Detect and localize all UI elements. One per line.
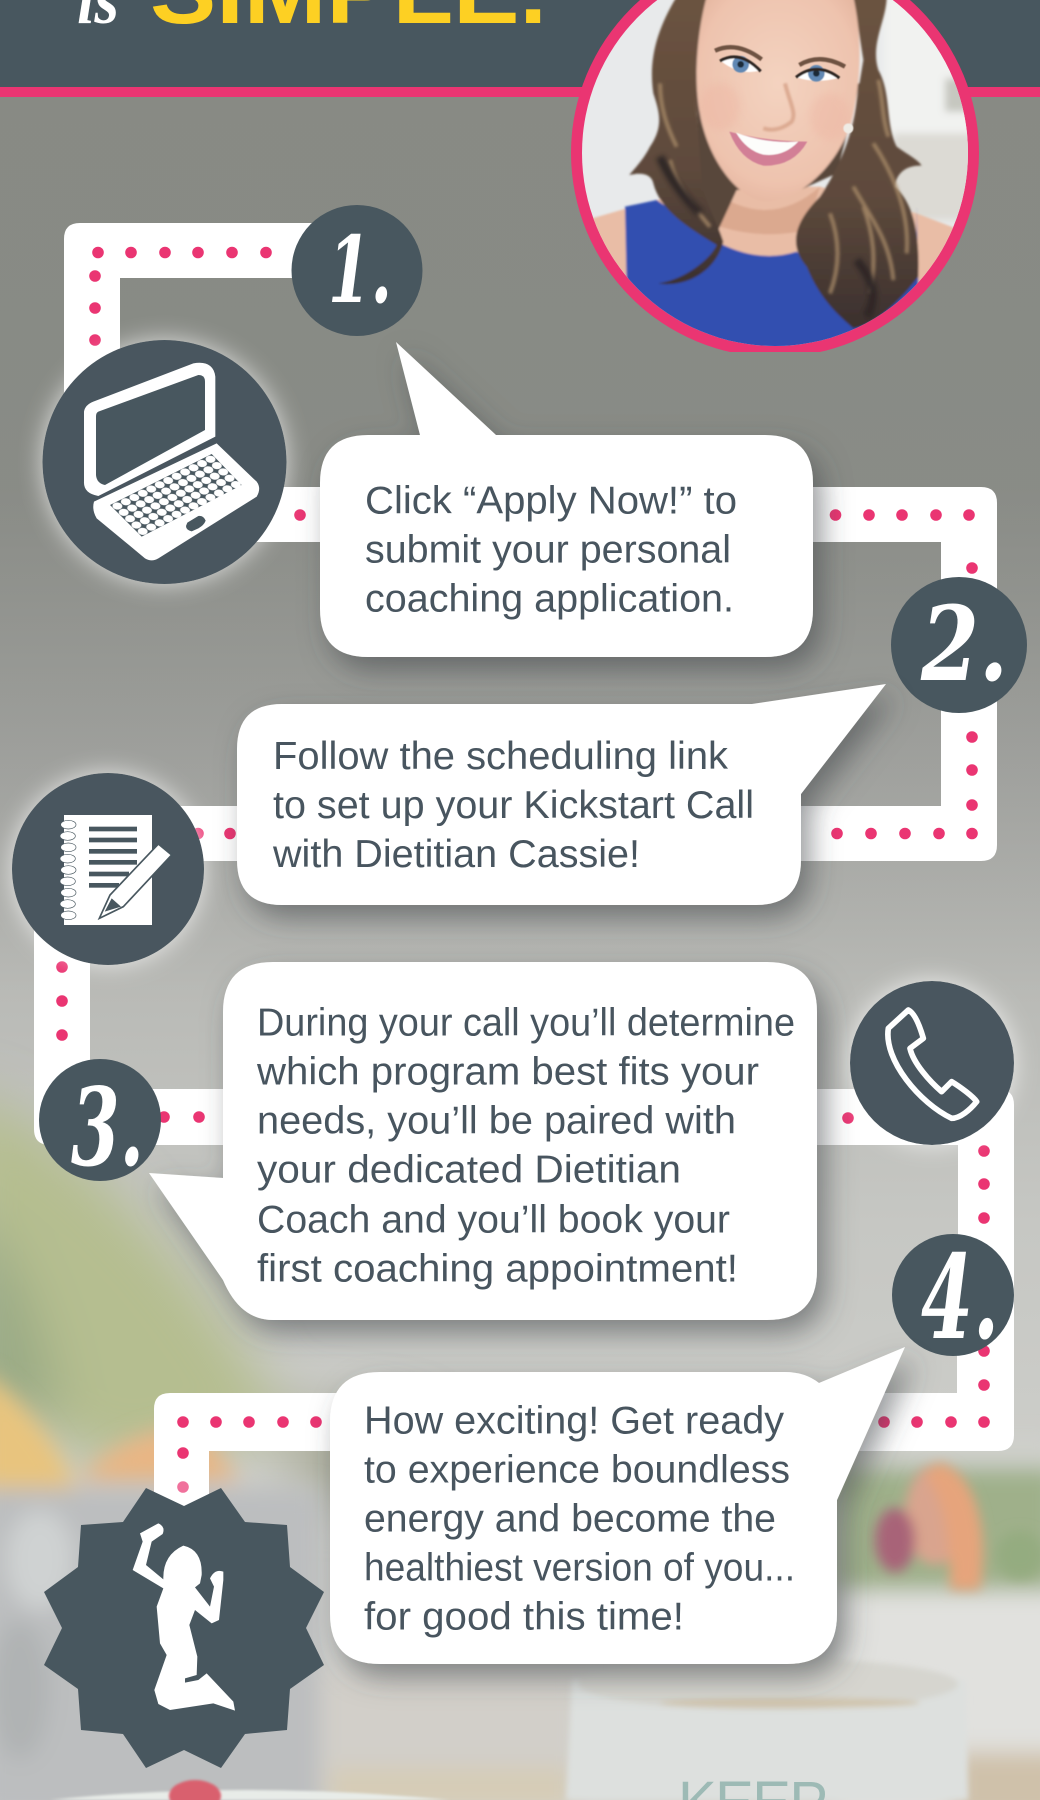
speech bubble: step 3: first coaching appointment! xyxy=(257,1248,738,1290)
speech bubble: step 3: Coach and you’ll book your xyxy=(257,1198,730,1242)
back hair xyxy=(695,83,860,233)
dotted path ribbon: step 2 xyxy=(90,487,997,861)
speech bubble: step 4: to experience boundless xyxy=(364,1448,790,1492)
number badge 4: 4. xyxy=(921,1230,999,1366)
speech bubble: step 1: coaching application. xyxy=(365,578,734,620)
icon: notepad and pencil xyxy=(12,773,204,965)
face xyxy=(697,0,860,202)
dotted path ribbon: step 4 xyxy=(154,1280,1014,1510)
icon: starburst with jumping woman xyxy=(44,1488,324,1768)
icon: laptop xyxy=(42,340,286,584)
number badge 3 xyxy=(39,1059,161,1191)
dress xyxy=(624,198,920,346)
dotted path ribbon: step 3 xyxy=(34,860,1014,1300)
icon: telephone xyxy=(850,981,1014,1145)
portrait of Dietitian Cassie xyxy=(553,0,987,367)
speech bubble: step 4: healthiest version of you... xyxy=(364,1546,795,1590)
speech bubble: step 3: which program best fits your xyxy=(256,1050,759,1094)
speech bubble: step 2: with Dietitian Cassie! xyxy=(272,833,640,876)
speech bubble: step 1: submit your personal xyxy=(365,528,731,572)
brows, eyes, mouth xyxy=(715,47,853,166)
speech bubble: step 2: to set up your Kickstart Call xyxy=(273,784,754,827)
number badge 2: 2. xyxy=(920,584,1008,705)
hair xyxy=(629,0,723,284)
speech bubble: step 4: energy and become the xyxy=(364,1498,776,1540)
speech bubble: step 1 xyxy=(320,342,813,657)
speech bubble: step 2 xyxy=(237,684,886,905)
speech bubble: step 3: needs, you’ll be paired with xyxy=(257,1100,736,1142)
dotted path ribbon: step 1 xyxy=(64,223,360,480)
number badge 2 xyxy=(891,577,1027,713)
number badge 1: 1. xyxy=(328,216,392,324)
number badge 4 xyxy=(892,1230,1014,1366)
number badge 3: 3. xyxy=(71,1065,144,1191)
speech bubble: step 2: Follow the scheduling link xyxy=(273,735,729,778)
speech bubble: step 3 xyxy=(149,962,817,1320)
shoulders and neck xyxy=(593,186,954,284)
number badge 1 xyxy=(292,205,422,336)
speech bubble: step 4 xyxy=(330,1347,905,1664)
speech bubble: step 1: Click “Apply Now!” to xyxy=(365,480,737,522)
speech bubble: step 4: for good this time! xyxy=(364,1596,684,1638)
speech bubble: step 4: How exciting! Get ready xyxy=(364,1400,785,1442)
header band xyxy=(0,0,1040,97)
speech bubble: step 3: During your call you’ll determine xyxy=(257,1002,795,1044)
speech bubble: step 3: your dedicated Dietitian xyxy=(257,1148,681,1192)
